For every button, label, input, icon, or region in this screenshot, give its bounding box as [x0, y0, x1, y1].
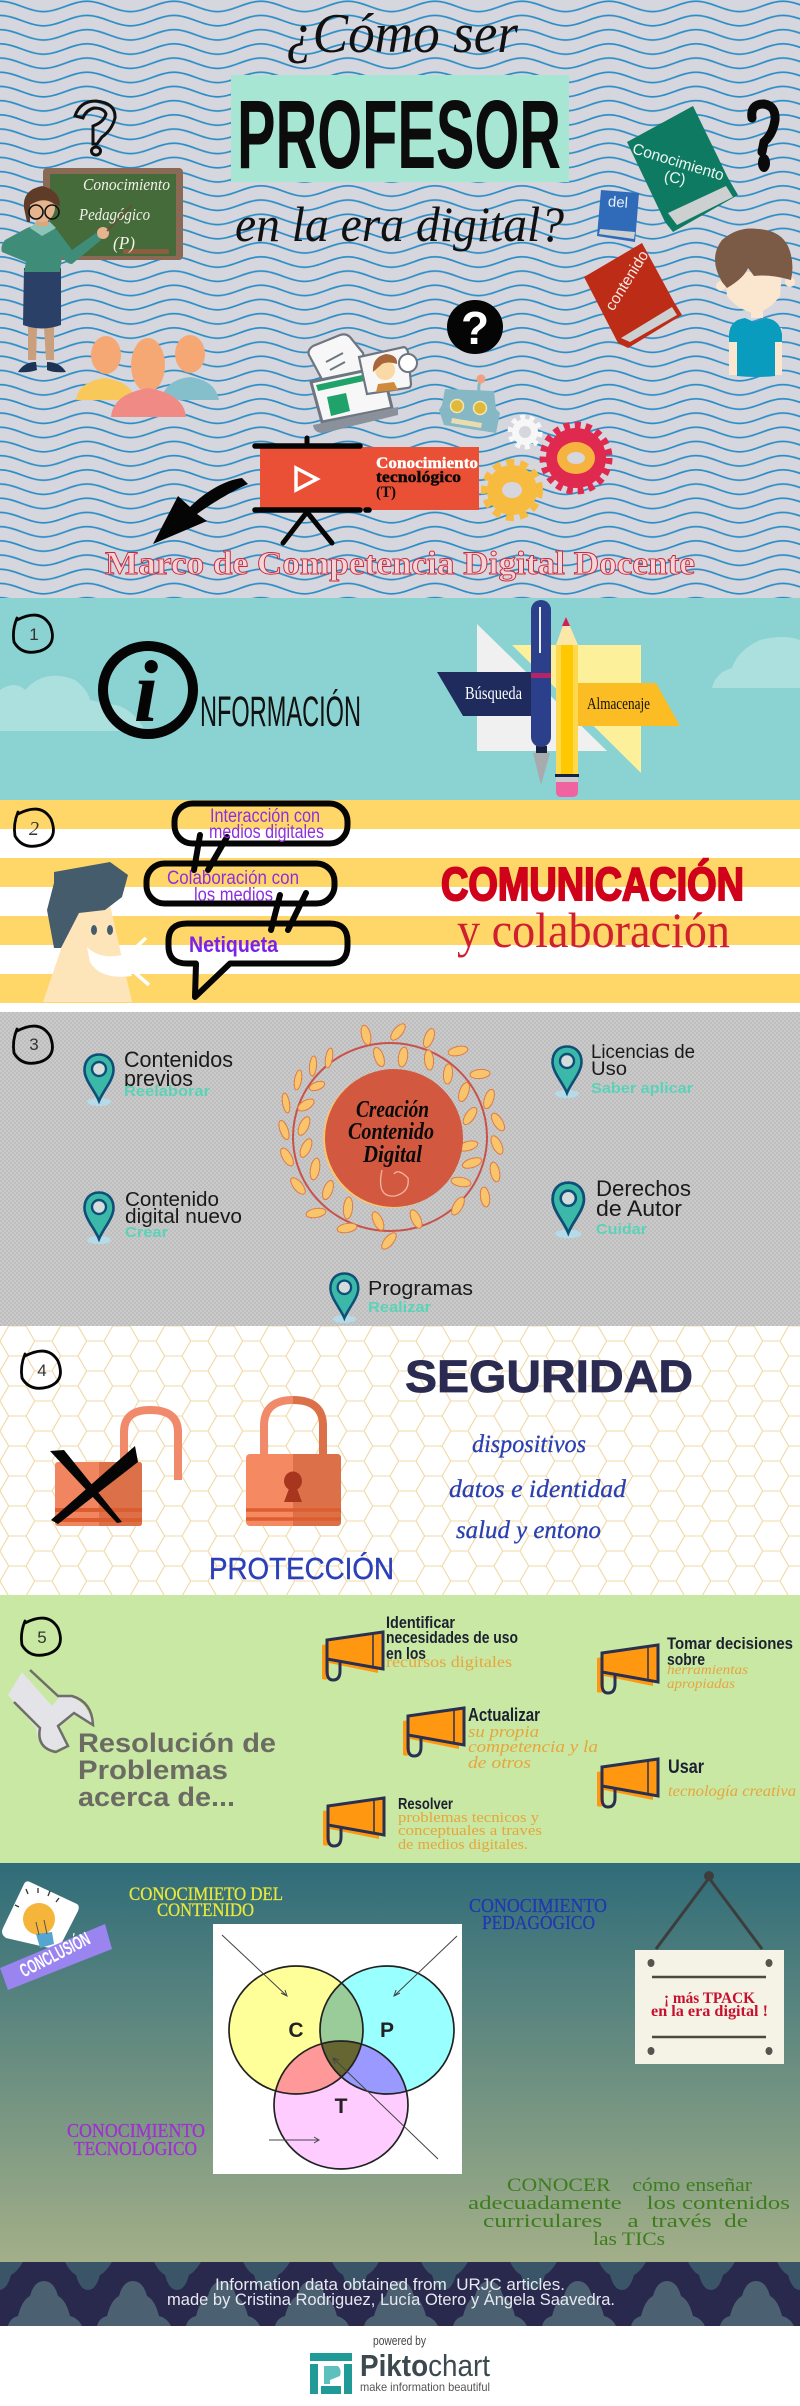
- panel: piktochart branding: [0, 2326, 800, 2406]
- icon: question mark badge: ?: [461, 302, 489, 354]
- TPACK venn diagram: P: [380, 2019, 394, 2042]
- item: Identificar: Identificar: [386, 1613, 455, 1632]
- book: del: del: [607, 193, 629, 212]
- icon: closed padlock: [246, 1400, 341, 1526]
- item: Tomar decisiones: herramientas: [667, 1663, 749, 1678]
- central circle: Creación Contenido Digital: Creación: [356, 1097, 429, 1123]
- item: Contenidos previos: Contenidos: [124, 1047, 233, 1072]
- icon: robot: [439, 374, 500, 433]
- speech bubble: Interacción con medios digitales: [174, 804, 348, 870]
- banner: CONCLUSIÓN: [0, 1924, 112, 1990]
- banner: Almacenaje: [577, 683, 680, 726]
- heading: Resolución de Problemas acerca de: [78, 1728, 276, 1812]
- speech bubble: Interacción con medios digitales: Interacción con: [210, 806, 320, 827]
- item: Identificar: [322, 1613, 518, 1680]
- heading box: PROFESOR: PROFESOR: [237, 80, 561, 189]
- label: conocimiento del contenido: [129, 1884, 283, 1921]
- text: conocer cómo enseñar: las TICs: [593, 2229, 665, 2250]
- halftone background: [0, 1012, 800, 1326]
- text: conocer cómo enseñar: curriculares a través de: [483, 2211, 748, 2232]
- wreath: [277, 1021, 507, 1252]
- item: Usar: [597, 1757, 796, 1807]
- number 3: [13, 1026, 52, 1063]
- item: Actualizar: Actualizar: [468, 1705, 540, 1725]
- book: contenido: contenido: [602, 248, 652, 314]
- icon: group of people: [76, 335, 219, 417]
- wave background: [0, 0, 800, 599]
- item: Resolver: Resolver: [398, 1796, 453, 1813]
- book: Conocimiento (C): Conocimiento: [630, 141, 726, 185]
- item: Tomar decisiones: apropiadas: [667, 1677, 736, 1692]
- item: Licencias de Uso: Saber aplicar: [591, 1080, 693, 1097]
- powered by: powered by: [373, 2334, 427, 2348]
- item: Resolver: conceptuales a traves: [398, 1823, 542, 1839]
- icon: yellow gear: [484, 462, 540, 518]
- icon: question mark badge: [447, 300, 503, 354]
- number 1: [13, 615, 52, 652]
- credits text: made by Cristina Rodriguez, Lucía Otero y Ángela Saavedra.: [167, 2290, 615, 2309]
- wordmark: Piktochart: Piktochart: [360, 2348, 490, 2383]
- chalkboard with text: Pedagógico: [78, 205, 150, 224]
- clouds: [0, 637, 800, 731]
- icon: red gear: [543, 425, 609, 491]
- hanging sign: más TPACK: [635, 1871, 784, 2064]
- heading: NFORMACIÓN: NFORMACIÓN: [200, 688, 361, 736]
- TPACK venn diagram: T: [335, 2095, 348, 2118]
- item: Contenidos previos: [84, 1047, 233, 1106]
- item: Contenidos previos: previos: [124, 1066, 193, 1091]
- item: Identificar: en los: [386, 1644, 426, 1663]
- TPACK venn diagram: C: [288, 2019, 304, 2042]
- panel: footer credits: [0, 2262, 800, 2326]
- item: Licencias de Uso: Licencias de: [591, 1042, 695, 1063]
- honeycomb background: [0, 1326, 800, 1595]
- heading: y colaboración: y colaboración: [457, 902, 730, 958]
- panel: conclusión: [0, 1863, 800, 2262]
- item: Licencias de Uso: [552, 1042, 695, 1098]
- book: Conocimiento (C): [627, 106, 738, 232]
- striped background: [0, 800, 800, 1012]
- item: Usar: tecnología creativa: [668, 1783, 796, 1800]
- icon: student boy: [715, 228, 795, 377]
- background: [0, 1595, 800, 1863]
- panel 3: creación de contenido digital: [0, 1012, 800, 1326]
- number 5: [21, 1618, 60, 1655]
- heading: Marco de Competencia Digital Docente: Marco de Competencia Digital Docente: [105, 546, 695, 582]
- icon: pencil: [555, 617, 579, 797]
- item: Derechos de Autor: [553, 1176, 691, 1238]
- gradient background: [0, 1863, 800, 2262]
- banner: Búsqueda: Búsqueda: [465, 683, 522, 703]
- number 2: 2: [29, 818, 39, 840]
- patterned background: [0, 2262, 800, 2326]
- hanging sign: más TPACK: ¡ más TPACK: [664, 1990, 756, 2007]
- item: Identificar: necesidades de uso: [386, 1628, 518, 1647]
- panel: title section: [0, 0, 800, 599]
- panel 4: seguridad: [0, 1326, 800, 1595]
- heading: Resolución de Problemas acerca de: Resolución de: [78, 1728, 276, 1758]
- list: dispositivos, datos e identidad, salud y entono: dispositivos: [472, 1431, 586, 1458]
- item: Actualizar: de otros: [468, 1753, 531, 1772]
- speech bubble: Netiqueta: Netiqueta: [189, 932, 279, 957]
- text: conocer cómo enseñar: [468, 2175, 790, 2250]
- item: Actualizar: su propia: [468, 1722, 539, 1741]
- list: dispositivos, datos e identidad, salud y entono: salud y entono: [456, 1517, 601, 1544]
- icon: info circle: [103, 644, 193, 741]
- item: Tomar decisiones: sobre: [667, 1650, 705, 1669]
- character speaking: [43, 862, 149, 1002]
- item: Contenido digital nuevo: digital nuevo: [125, 1206, 242, 1228]
- item: Tomar decisiones: [597, 1634, 793, 1693]
- item: Actualizar: [403, 1705, 598, 1772]
- item: Usar: Usar: [668, 1757, 705, 1778]
- arrow pointing to the framework title: [153, 478, 248, 544]
- banner: Búsqueda: [437, 672, 533, 716]
- item: Resolver: problemas tecnicos y: [398, 1810, 540, 1826]
- pale shapes behind the pen: [477, 624, 641, 773]
- central circle: Creación Contenido Digital: Digital: [362, 1142, 422, 1168]
- item: Derechos de Autor: de Autor: [596, 1196, 682, 1221]
- icon: outlined question mark: [75, 101, 115, 155]
- list: dispositivos, datos e identidad, salud y entono: [449, 1431, 626, 1544]
- label: conocimiento tecnológico: CONOCIMIENTO: [67, 2120, 205, 2142]
- icon: black question mark: [752, 104, 775, 152]
- item: Programas: [330, 1273, 473, 1323]
- white background: [0, 2326, 800, 2406]
- panel 1: información: [0, 598, 800, 800]
- chalkboard with text: Conocimiento: [83, 175, 170, 194]
- logo mark: [310, 2353, 352, 2394]
- background: [0, 598, 800, 800]
- item: Licencias de Uso: Uso: [591, 1059, 627, 1080]
- item: Contenidos previos: Reelaborar: [124, 1083, 210, 1100]
- label: conocimiento pedagógico: CONOCIMIENTO: [469, 1895, 607, 1917]
- label: conocimiento tecnológico: [67, 2120, 205, 2160]
- text: conocer cómo enseñar: adecuadamente los contenidos: [468, 2193, 790, 2214]
- number 3: 3: [29, 1035, 39, 1054]
- chalkboard with text: (P): [113, 233, 135, 254]
- item: Contenido digital nuevo: Contenido: [125, 1189, 219, 1211]
- book: Conocimiento (C): (C): [663, 168, 687, 189]
- icon: teacher: [1, 186, 132, 372]
- label: conocimiento pedagógico: PEDAGÓGICO: [482, 1910, 595, 1934]
- icon: fountain pen: [531, 600, 551, 785]
- central circle: Creación Contenido Digital: Contenido: [348, 1119, 434, 1145]
- number 5: 5: [37, 1628, 47, 1647]
- icon: white gear: [510, 417, 540, 447]
- item: Derechos de Autor: Cuidar: [596, 1221, 647, 1238]
- list: dispositivos, datos e identidad, salud y entono: datos e identidad: [449, 1476, 626, 1503]
- subtitle: en la era digital: en la era digital?: [235, 196, 564, 252]
- book: contenido: [584, 243, 682, 348]
- item: Programas: Programas: [368, 1278, 473, 1300]
- label: PROTECCIÓN: PROTECCIÓN: [209, 1551, 394, 1586]
- projector board with play icon and text: Conocimiento: [376, 455, 478, 472]
- projector board with play icon and text: [255, 438, 479, 543]
- item: Resolver: de medios digitales.: [398, 1837, 528, 1853]
- number 4: 4: [37, 1361, 47, 1380]
- number 2: [14, 809, 53, 846]
- icon: info circle: i: [134, 644, 159, 741]
- icon: laptop with document and person: [308, 334, 417, 433]
- item: Derechos de Autor: Derechos: [596, 1176, 691, 1201]
- panel 2: comunicación y colaboración: [0, 800, 800, 1012]
- hanging sign: más TPACK: en la era digital !: [651, 2003, 768, 2020]
- TPACK venn diagram: [213, 1924, 462, 2174]
- tagline: make information beautiful: [360, 2380, 490, 2394]
- banner: CONCLUSIÓN: CONCLUSIÓN: [16, 1928, 94, 1982]
- projector board with play icon and text: (T): [376, 484, 396, 501]
- label: conocimiento del contenido: CONOCIMIETO DEL: [129, 1884, 283, 1905]
- number 4: [21, 1351, 60, 1388]
- heading: Resolución de Problemas acerca de: Problemas: [78, 1755, 228, 1785]
- item: Resolver: [323, 1796, 542, 1853]
- credits text: [167, 2275, 615, 2309]
- speech bubble: Colaboración con los medios: [146, 864, 334, 930]
- item: Identificar: recursos digitales: [386, 1654, 512, 1671]
- speech bubble: Netiqueta: [168, 924, 348, 997]
- speech bubble: Colaboración con los medios: los medios: [194, 885, 273, 906]
- icon: open padlock crossed out: [50, 1410, 178, 1526]
- credits text: Information data obtained from URJC articles.: [215, 2275, 565, 2294]
- title: ¿Cómo ser: ¿Cómo ser: [286, 3, 518, 65]
- icon: light bulb card: [2, 1881, 79, 1950]
- banner: Almacenaje: Almacenaje: [587, 694, 650, 713]
- speech bubble: Interacción con medios digitales: medios digitales: [209, 822, 324, 843]
- book: del: [597, 190, 639, 242]
- heading box: PROFESOR: [231, 75, 569, 189]
- heading: Resolución de Problemas acerca de: acerca de...: [78, 1782, 235, 1812]
- item: Programas: Realizar: [368, 1299, 431, 1316]
- projector board with play icon and text: tecnológico: [376, 469, 461, 486]
- panel 5: resolución de problemas: [0, 1595, 800, 1863]
- item: Actualizar: competencia y la: [468, 1737, 598, 1756]
- number 1: 1: [29, 625, 39, 644]
- central circle: Creación Contenido Digital: [323, 1069, 463, 1208]
- text: conocer cómo enseñar: CONOCER cómo enseñar: [507, 2175, 753, 2196]
- label: conocimiento pedagógico: [469, 1895, 607, 1934]
- item: Contenido digital nuevo: Crear: [125, 1224, 168, 1241]
- icon: wrench: [8, 1670, 93, 1752]
- label: conocimiento tecnológico: TECNOLÓGICO: [74, 2136, 197, 2160]
- icon: question mark dot: [758, 154, 770, 172]
- label: conocimiento del contenido: CONTENIDO: [157, 1900, 254, 1921]
- speech bubble: Colaboración con los medios: Colaboración con: [167, 868, 299, 889]
- item: Contenido digital nuevo: [84, 1189, 242, 1244]
- heading: COMUNICACIÓN: COMUNICACIÓN: [441, 858, 744, 910]
- chalkboard with text: [43, 168, 183, 260]
- heading: SEGURIDAD: SEGURIDAD: [405, 1351, 693, 1402]
